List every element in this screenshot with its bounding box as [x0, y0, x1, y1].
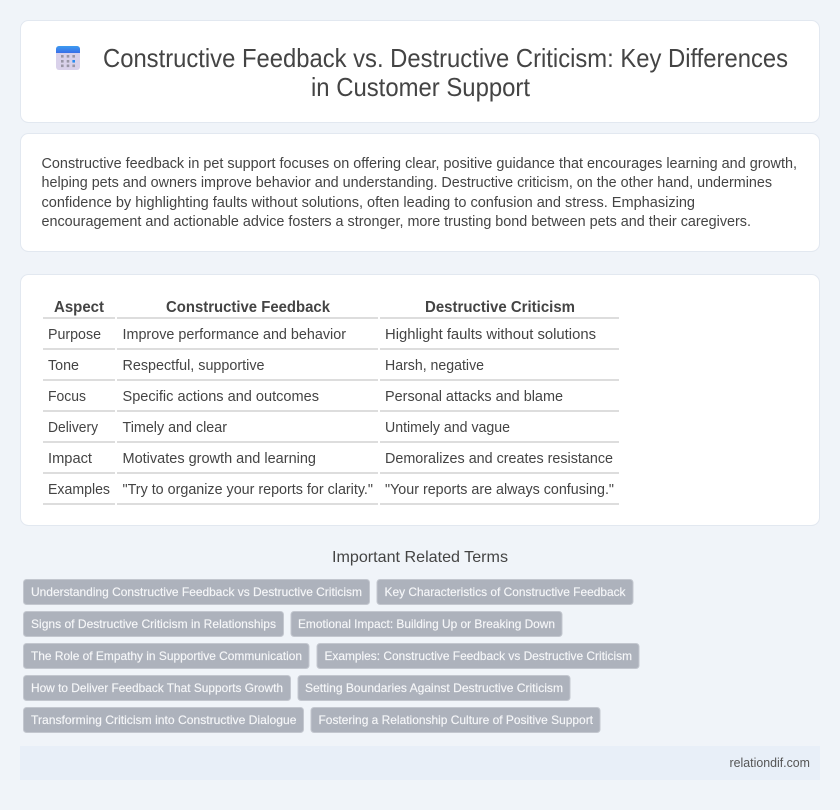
table row: tone — [48, 358, 484, 374]
panel: introduction — [20, 134, 820, 252]
table row: tone: Harsh, negative — [385, 358, 484, 374]
table row: examples — [48, 482, 614, 498]
tag — [24, 644, 309, 668]
table row: delivery: Untimely and vague — [385, 420, 510, 436]
table row: delivery — [48, 420, 510, 436]
table row: purpose — [48, 327, 596, 343]
table row: purpose: Purpose — [48, 327, 101, 343]
table row: impact: Demoralizes and creates resistance — [385, 451, 613, 467]
tag — [377, 580, 633, 604]
panel: comparison table — [20, 274, 820, 526]
tag: Examples: Constructive Feedback vs Destructive Criticism — [324, 649, 632, 663]
table row: tone: Tone — [48, 358, 79, 374]
table row: examples: "Try to organize your reports for clarity." — [122, 482, 373, 498]
panel: header — [20, 20, 820, 122]
title — [103, 45, 788, 102]
tag — [291, 612, 562, 636]
tag: The Role of Empathy in Supportive Communication — [31, 649, 302, 663]
footer: relationdif.com — [730, 755, 810, 770]
text block: introduction — [42, 156, 797, 230]
tag — [298, 676, 570, 700]
icon: calendar — [56, 46, 80, 70]
tag — [311, 708, 600, 732]
table row: delivery: Timely and clear — [122, 420, 227, 436]
table header row — [54, 299, 575, 316]
heading: important related terms: Important Related Terms — [332, 549, 508, 566]
tag: Understanding Constructive Feedback vs Destructive Criticism — [31, 585, 362, 599]
table row: focus — [48, 389, 563, 405]
text block: introduction: helping pets and owners improve behavior and understanding. Destructive criticism, on the other hand, undermines — [42, 175, 772, 191]
tag: Setting Boundaries Against Destructive Criticism — [305, 681, 563, 695]
related terms tags — [24, 580, 639, 732]
table row: impact: Impact — [48, 451, 92, 467]
table header row: Constructive Feedback — [166, 299, 330, 316]
table row: focus: Personal attacks and blame — [385, 389, 563, 405]
tag: Transforming Criticism into Constructive Dialogue — [31, 713, 297, 727]
tag: Fostering a Relationship Culture of Positive Support — [318, 713, 594, 727]
table header row: Aspect — [54, 299, 104, 316]
tag — [24, 708, 304, 732]
text block: introduction: encouragement and actionable advice fosters a stronger, more trusting bond between pets and their caregivers. — [42, 214, 751, 230]
table row: impact: Motivates growth and learning — [122, 451, 316, 467]
table row: delivery: Delivery — [48, 420, 99, 436]
tag: Signs of Destructive Criticism in Relationships — [31, 617, 276, 631]
table row: tone: Respectful, supportive — [122, 358, 264, 374]
text block: introduction: Constructive feedback in pet support focuses on offering clear, positive guidance that encourages learning and growth, — [42, 156, 797, 172]
tag: Key Characteristics of Constructive Feedback — [384, 585, 626, 599]
tag — [317, 644, 639, 668]
table row: purpose: Highlight faults without solutions — [385, 327, 596, 343]
table row: examples: "Your reports are always confusing." — [385, 482, 614, 498]
table row: impact — [48, 451, 613, 467]
table row: focus: Focus — [48, 389, 86, 405]
tag — [24, 676, 290, 700]
tag: Emotional Impact: Building Up or Breaking Down — [298, 617, 555, 631]
table row: focus: Specific actions and outcomes — [122, 389, 319, 405]
table row: purpose: Improve performance and behavior — [122, 327, 346, 343]
tag — [24, 580, 370, 604]
table header row: Destructive Criticism — [425, 299, 575, 316]
title: in Customer Support — [311, 74, 530, 102]
text block: introduction: confidence by highlighting faults without solutions, often leading to confusion and stress. Emphasizing — [42, 195, 695, 211]
title: Constructive Feedback vs. Destructive Criticism: Key Differences — [103, 45, 788, 73]
tag: How to Deliver Feedback That Supports Growth — [31, 681, 283, 695]
tag — [24, 612, 284, 636]
footer — [20, 746, 820, 780]
table row: examples: Examples — [48, 482, 110, 498]
